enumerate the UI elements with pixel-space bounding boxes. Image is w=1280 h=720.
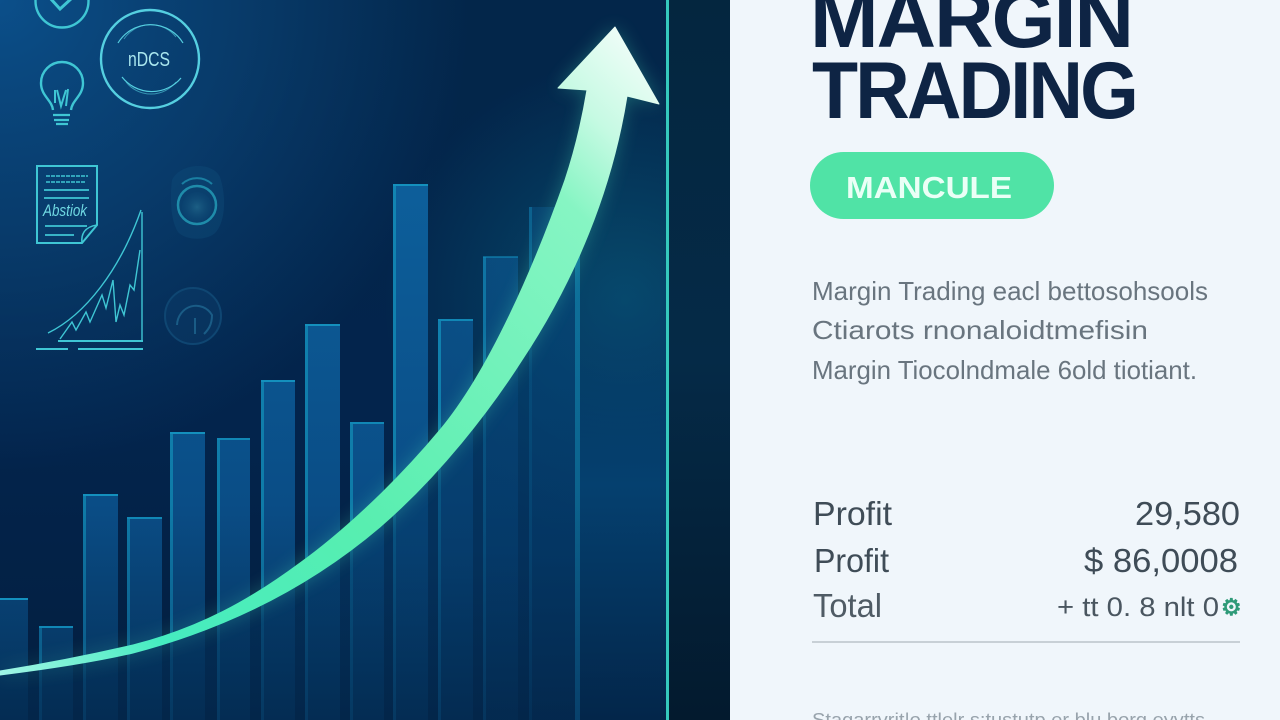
panel: dark chart background	[0, 0, 730, 720]
bar chart	[0, 184, 575, 720]
icon: mini growth chart	[36, 210, 143, 349]
divider	[812, 641, 1240, 643]
text block: description	[812, 276, 1208, 385]
icon: round seal	[101, 10, 199, 108]
icon: round seal: nDCS	[128, 49, 170, 71]
panel: right text column	[730, 0, 1280, 720]
icon: faint gauge	[165, 288, 221, 344]
table: profit rows: $ 86,0008	[1084, 542, 1238, 579]
icon: document	[37, 166, 97, 243]
text block: description: Margin Tiocolndmale 6old tiotiant.	[812, 355, 1197, 385]
text block: description: Margin Trading eacl bettosohsools	[812, 276, 1208, 306]
heading: margin trading: TRADING	[812, 46, 1136, 136]
table: profit rows: + tt 0. 8 nlt 0	[1057, 592, 1219, 622]
last bar edge	[575, 255, 580, 720]
vertical teal rule	[666, 0, 669, 720]
shaded area under the arrow	[0, 255, 575, 720]
icon: light bulb	[41, 62, 83, 124]
table: profit rows: Profit	[813, 495, 892, 532]
table: profit rows: ⚙	[1221, 594, 1242, 620]
icon: faint stopwatch	[171, 166, 224, 239]
heading: margin trading	[810, 0, 1136, 136]
badge: pill label: MANCULE	[846, 170, 1012, 205]
table: profit rows: 29,580	[1135, 495, 1240, 532]
table: profit rows	[813, 495, 1242, 624]
text block: description: Ctiarots rnonaloidtmefisin	[812, 315, 1148, 345]
table: profit rows: Profit	[814, 542, 889, 579]
icon: document: Abstiok	[42, 201, 88, 220]
table: profit rows: Total	[813, 587, 882, 624]
icon: check badge	[36, 0, 88, 28]
badge: pill label	[810, 152, 1054, 219]
arrow: rising growth curve	[0, 27, 659, 675]
